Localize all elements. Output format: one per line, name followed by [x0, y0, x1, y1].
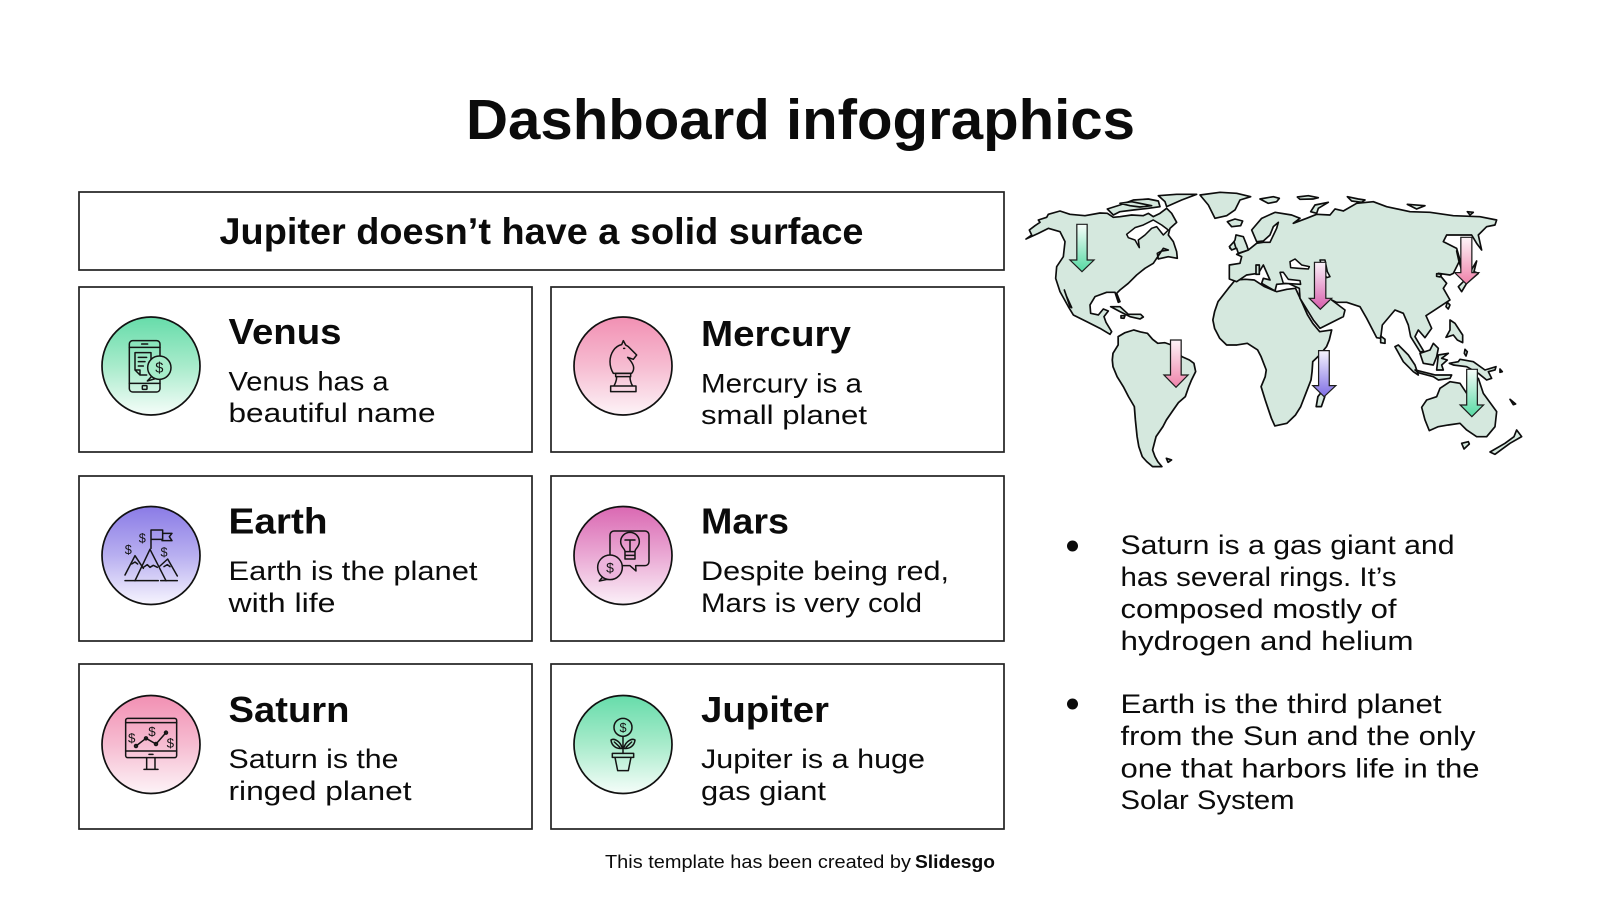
- panel: Earth: [79, 476, 532, 641]
- map arrows: [1070, 224, 1484, 417]
- footer credit: This template has been created by: [605, 852, 911, 872]
- icon: mountain with flag: [102, 506, 200, 604]
- Saturn heading: Saturn: [228, 689, 350, 730]
- Earth description: [227, 556, 478, 618]
- map: Eurasia and islands: [1200, 192, 1497, 352]
- bullet block: Earth: from the Sun and the only: [1120, 721, 1476, 751]
- arrow: Madagascar: [1313, 351, 1336, 397]
- panel: Mercury: [551, 287, 1004, 452]
- panel: Saturn: [79, 664, 532, 829]
- icon: mountain with flag: $: [125, 543, 132, 557]
- panel: headline banner: [79, 192, 1004, 270]
- Earth description: Earth is the planet: [228, 556, 478, 586]
- Mercury description: small planet: [701, 400, 868, 430]
- icon: phone with dollar bubble: [102, 317, 200, 415]
- Venus description: beautiful name: [228, 398, 436, 428]
- bullet block: Earth: one that harbors life in the: [1120, 754, 1480, 784]
- Mercury heading: Mercury: [701, 313, 851, 354]
- bullet block: Saturn: has several rings. It’s: [1120, 562, 1396, 592]
- panel: Mars: [551, 476, 1004, 641]
- icon: light bulb and dollar speech bubbles: [574, 506, 672, 604]
- Mars description: [701, 556, 949, 618]
- arrow: Japan: [1455, 237, 1479, 284]
- footer credit: Slidesgo: [915, 852, 995, 872]
- icon: monitor with chart: [102, 696, 200, 794]
- arrow: North America: [1070, 224, 1094, 272]
- Saturn description: Saturn is the: [228, 744, 398, 774]
- Jupiter description: gas giant: [701, 776, 827, 806]
- title: Dashboard infographics: [466, 88, 1135, 152]
- arrow: South America: [1164, 340, 1188, 387]
- bullet block: Earth: Solar System: [1120, 785, 1294, 815]
- arrow: Arabia: [1309, 262, 1332, 309]
- Mercury description: [701, 368, 868, 430]
- bullet block: Saturn: [1067, 530, 1454, 656]
- bullet block: Saturn: Saturn is a gas giant and: [1120, 530, 1454, 560]
- panel: Jupiter: [551, 664, 1004, 829]
- Earth heading: Earth: [228, 500, 328, 542]
- icon: money plant: $: [619, 721, 627, 735]
- bullet block: Saturn: composed mostly of: [1120, 594, 1397, 624]
- Mars heading: Mars: [701, 500, 789, 542]
- Venus description: [228, 366, 436, 428]
- world map with arrows: [1026, 192, 1522, 467]
- bullet block: Saturn: hydrogen and helium: [1120, 626, 1414, 656]
- Saturn description: [228, 744, 412, 806]
- Jupiter description: Jupiter is a huge: [701, 744, 925, 774]
- arrow: Australia: [1460, 369, 1484, 417]
- icon: chess knight: [574, 317, 672, 415]
- icon: mountain with flag: $: [139, 531, 146, 545]
- Jupiter description: [701, 744, 925, 806]
- map: North America and Greenland: [1026, 194, 1197, 334]
- icon: money plant: [574, 696, 672, 794]
- Mars description: Mars is very cold: [701, 588, 922, 618]
- icon: light bulb and dollar speech bubbles: $: [606, 559, 614, 575]
- icon: monitor with chart: $: [128, 730, 136, 745]
- map: South America and Africa: [1112, 279, 1332, 467]
- Jupiter heading: Jupiter: [701, 689, 829, 730]
- bullet block: Earth: Earth is the third planet: [1120, 689, 1442, 719]
- Venus heading: Venus: [228, 311, 342, 352]
- banner text: Jupiter doesn’t have a solid surface: [220, 211, 864, 252]
- icon: monitor with chart: $: [167, 735, 175, 750]
- Venus description: Venus has a: [228, 366, 390, 396]
- Mars description: Despite being red,: [701, 556, 949, 586]
- Saturn description: ringed planet: [228, 776, 412, 806]
- panel: Venus: [79, 287, 532, 452]
- Earth description: with life: [227, 588, 336, 618]
- map: South-East Asia and Oceania: [1381, 320, 1522, 454]
- icon: monitor with chart: $: [148, 724, 156, 739]
- icon: mountain with flag: $: [160, 546, 168, 560]
- Mercury description: Mercury is a: [701, 368, 863, 398]
- icon: phone with dollar bubble: $: [155, 361, 163, 377]
- bullet block: Earth: [1067, 689, 1480, 815]
